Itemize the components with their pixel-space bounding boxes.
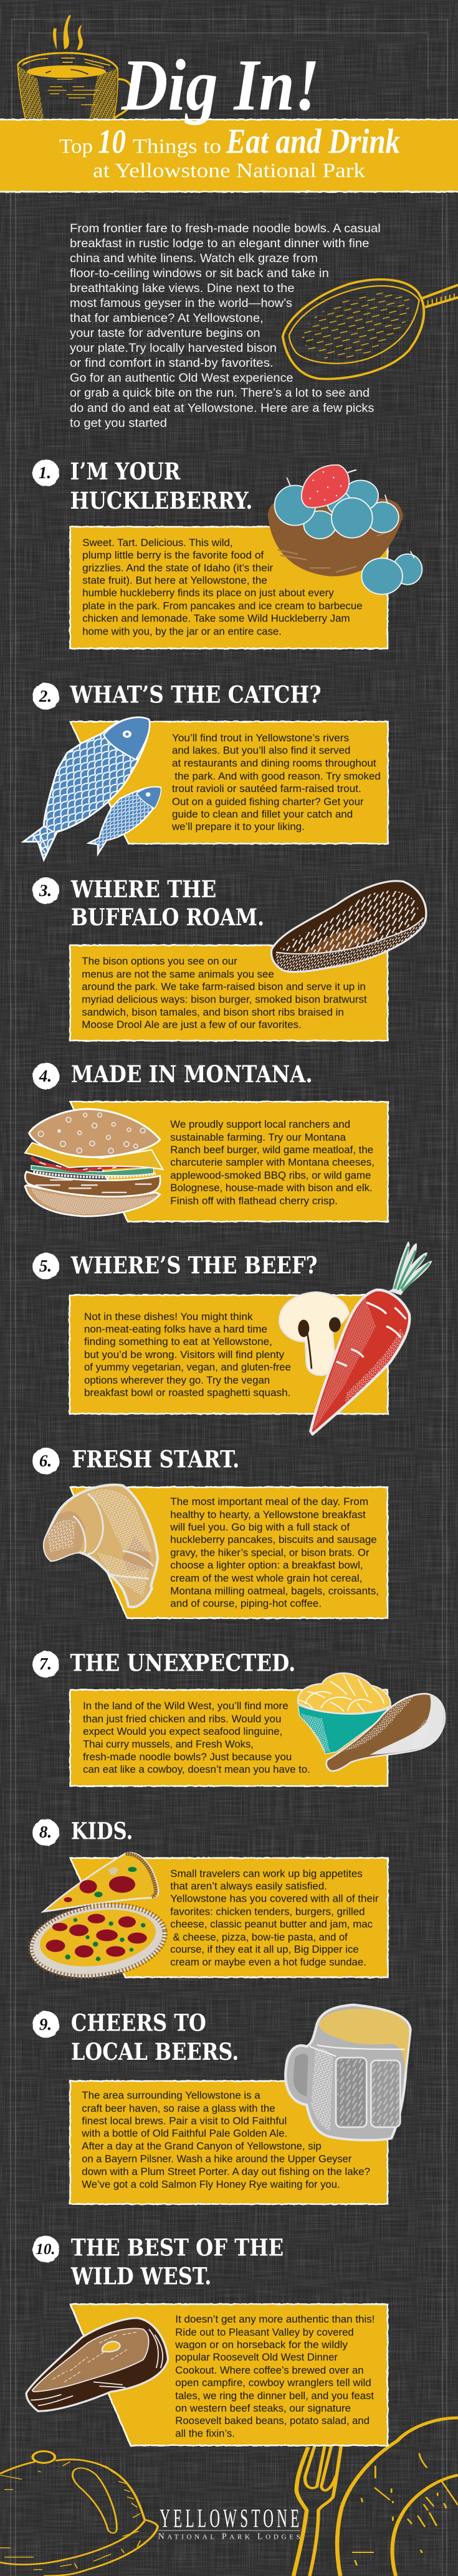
text 4: charcuterie sampler with Montana cheeses,	[170, 1156, 375, 1168]
subtitle: 10	[98, 122, 126, 161]
text 6: and of course, piping-hot coffee.	[170, 1597, 322, 1609]
text 8: cheese, classic peanut butter and jam, mac	[170, 1918, 373, 1930]
intro paragraph: do and do and eat at Yellowstone. Here are a few picks	[70, 401, 375, 415]
heading 10: THE BEST OF THE	[71, 2234, 284, 2261]
intro paragraph: Go for an authentic Old West experience	[70, 371, 293, 385]
heading 4: MADE IN MONTANA.	[71, 1060, 313, 1088]
text 1: plate in the park. From pancakes and ice cream to barbecue	[82, 600, 363, 612]
text 6: The most important meal of the day. From	[170, 1496, 368, 1507]
text 2: guide to clean and fillet your catch and	[172, 808, 353, 820]
icon: noodle bowl and drumstick	[298, 1673, 445, 1771]
section 9: cheers to local beers	[32, 2005, 411, 2204]
section 4: made in Montana	[25, 1060, 388, 1222]
number badge 2: 2.	[39, 687, 52, 705]
icon: bison steak	[271, 881, 426, 972]
intro paragraph: your taste for adventure begins on	[70, 326, 260, 340]
text 10: open campfire, cowboy wranglers tell wild	[175, 2377, 371, 2389]
heading 5: WHERE’S THE BEEF?	[70, 1252, 317, 1279]
heading 9	[71, 2009, 239, 2065]
text 7: can eat like a cowboy, doesn’t mean you have to.	[83, 1763, 310, 1775]
heading 9: LOCAL BEERS.	[71, 2038, 239, 2065]
heading 9: CHEERS TO	[71, 2009, 206, 2037]
section 8: kids	[25, 1818, 388, 1985]
intro paragraph: or find comfort in stand-by favorites.	[70, 356, 274, 370]
intro paragraph: breakfast in rustic lodge to an elegant dinner with fine	[70, 237, 369, 250]
number badge 9	[32, 2011, 59, 2038]
text 8	[170, 1867, 379, 1968]
icon: beer mug	[285, 2005, 411, 2140]
panel 10	[70, 2304, 388, 2445]
heading 3: BUFFALO ROAM.	[71, 903, 264, 931]
number badge 6	[32, 1448, 59, 1474]
text 1: chicken and lemonade. Take some Wild Huckleberry Jam	[82, 613, 350, 625]
text 3: Moose Drool Ale are just a few of our favorites.	[82, 1019, 302, 1031]
number badge 4	[32, 1063, 59, 1090]
number badge 10	[32, 2235, 59, 2263]
text 6: huckleberry pancakes, biscuits and sausage	[170, 1534, 377, 1545]
number badge 2	[32, 683, 59, 710]
subtitle: Things to	[133, 136, 221, 158]
text 10: popular Roosevelt Old West Dinner	[175, 2351, 338, 2363]
text 10	[174, 2313, 375, 2439]
heading 2: WHAT’S THE CATCH?	[70, 681, 322, 709]
text 2: at restaurants and dining rooms throughout	[172, 757, 376, 769]
number badge 3	[32, 877, 59, 904]
text 3: myriad delicious ways: bison burger, smoked bison bratwurst	[82, 993, 367, 1005]
panel 1	[70, 527, 388, 649]
intro paragraph: your plate.Try locally harvested bison	[70, 341, 277, 355]
footer illustration: cloche, fork and plate	[0, 2418, 458, 2576]
number badge 10: 10.	[36, 2241, 55, 2258]
text 10: It doesn’t get any more authentic than this!	[175, 2313, 375, 2325]
icon: burger	[25, 1109, 163, 1216]
text 10: Ride out to Pleasant Valley by covered	[175, 2326, 354, 2338]
text 5: but you’d be wrong. Visitors will find plenty	[84, 1349, 285, 1361]
text 9: finest local brews. Pair a visit to Old Faithful	[82, 2115, 287, 2127]
text 5: breakfast bowl or roasted spaghetti squash.	[84, 1387, 290, 1399]
heading 7: THE UNEXPECTED.	[70, 1649, 295, 1676]
text 10: tales, we ring the dinner bell, and you feast	[175, 2390, 374, 2402]
panel 5	[70, 1295, 388, 1413]
panel 7	[70, 1690, 388, 1786]
text 8: course, if they eat it all up, Big Dipper ice	[170, 1943, 359, 1955]
icon: frying pan	[283, 280, 458, 379]
text 1: home with you, by the jar or an entire case.	[82, 626, 282, 638]
text 7	[83, 1700, 310, 1775]
number badge 7: 7.	[39, 1654, 52, 1673]
text 5: non-meat-eating folks have a hard time	[84, 1323, 267, 1335]
number badge 8: 8.	[39, 1823, 52, 1841]
text 8: favorites: chicken tenders, burgers, grilled	[170, 1905, 365, 1917]
section 2: what's the catch	[24, 681, 388, 860]
heading 3: WHERE THE	[70, 875, 216, 903]
panel 4	[70, 1102, 388, 1222]
text 9: After a day at the Grand Canyon of Yellowstone, sip	[82, 2140, 322, 2152]
text 2	[171, 732, 381, 833]
icon: T-bone steak	[26, 2318, 168, 2411]
section 1: I'm your huckleberry	[32, 458, 422, 649]
text 9	[81, 2090, 370, 2190]
number badge 5	[32, 1253, 59, 1279]
number badge 4: 4.	[39, 1067, 52, 1085]
text 9: down with a Plum Street Porter. A day out fishing on the lake?	[82, 2166, 370, 2177]
section 3: where the buffalo roam	[32, 875, 426, 1040]
heading 1: I’M YOUR	[70, 458, 181, 485]
icon: two trout	[24, 717, 161, 860]
text 1: state fruit). But here at Yellowstone, the	[82, 574, 267, 587]
text 7: Thai curry mussels, and Fresh Woks,	[83, 1738, 254, 1750]
text 10: on western beef steaks, our signature	[175, 2402, 351, 2414]
text 2: Out on a guided fishing charter? Get your	[172, 796, 364, 808]
subtitle: at Yellowstone National Park	[93, 159, 366, 182]
intro paragraph: china and white linens. Watch elk graze from	[70, 252, 318, 265]
text 4: We proudly support local ranchers and	[170, 1118, 350, 1130]
text 1: plump little berry is the favorite food of	[82, 549, 264, 561]
text 1: humble huckleberry finds its place on just about every	[82, 587, 334, 599]
text 8: cream or maybe even a hot fudge sundae.	[170, 1956, 366, 1968]
heading 3	[70, 875, 264, 931]
intro paragraph: that for ambience? At Yellowstone,	[70, 311, 264, 325]
text 2: we’ll prepare it to your liking.	[171, 821, 305, 833]
icon: croissant	[44, 1485, 158, 1607]
section 10: the best of the wild west	[26, 2234, 388, 2445]
text 3: sandwich, bison tamales, and bison short ribs braised in	[82, 1006, 344, 1018]
text 9: We’ve got a cold Salmon Fly Honey Rye waiting for you.	[82, 2178, 340, 2190]
text 7: In the land of the Wild West, you’ll find more	[83, 1700, 289, 1712]
logo: Yellowstone National Park Lodges: YELLOWSTONE	[160, 2505, 299, 2533]
text 5	[84, 1311, 291, 1399]
text 8: & cheese, pizza, bow-tie pasta, and of	[173, 1932, 348, 1943]
heading 10: WILD WEST.	[70, 2262, 211, 2290]
text 4: sustainable farming. Try our Montana	[170, 1131, 346, 1143]
text 10: Cookout. Where coffee’s brewed over an	[175, 2364, 364, 2376]
text 6: healthy to hearty, a Yellowstone breakfast	[170, 1509, 366, 1521]
text 4	[170, 1118, 375, 1207]
logo: Yellowstone National Park Lodges: N ATIONAL P ARK L ODGES	[158, 2532, 300, 2542]
section 7: the unexpected	[32, 1649, 445, 1786]
number badge 1	[32, 460, 59, 486]
intro paragraph: floor-to-ceiling windows or sit back and take in	[70, 267, 329, 280]
heading 8: KIDS.	[71, 1818, 133, 1845]
text 4: Ranch beef burger, wild game meatloaf, the	[170, 1144, 373, 1156]
text 5: finding something to eat at Yellowstone,	[84, 1336, 272, 1347]
panel 6	[70, 1487, 388, 1618]
number badge 5: 5.	[39, 1257, 52, 1275]
intro paragraph: breathtaking lake views. Dine next to the	[70, 281, 295, 295]
text 7: expect Would you expect seafood linguine,	[83, 1725, 282, 1737]
number badge 9: 9.	[39, 2015, 52, 2034]
text 6: gravy, the hiker’s special, or bison brats. Or	[170, 1547, 370, 1559]
text 1: Sweet. Tart. Delicious. This wild,	[82, 537, 233, 549]
icon: bowl of huckleberries and strawberry	[268, 465, 422, 594]
icon: steaming coffee cup	[17, 16, 133, 119]
intro paragraph: most famous geyser in the world—how’s	[70, 296, 292, 310]
number badge 3: 3.	[39, 881, 52, 900]
text 5: of yummy vegetarian, vegan, and gluten-free	[84, 1361, 291, 1373]
text 7: fresh-made noodle bowls? Just because you	[83, 1751, 292, 1763]
text 4: Bolognese, house-made with bison and elk.	[170, 1182, 373, 1194]
icon: mushroom and carrot	[279, 1241, 432, 1434]
text 6: will fuel you. Go big with a full stack of	[169, 1521, 350, 1533]
heading 1	[70, 458, 253, 514]
text 5: Not in these dishes! You might think	[84, 1311, 253, 1323]
text 2: trout ravioli or sautéed farm-raised trout.	[172, 783, 361, 795]
text 6: cream of the west whole grain hot cereal,	[170, 1572, 362, 1584]
panel 8	[70, 1858, 388, 1977]
intro paragraph: or grab a quick bite on the run. There’s a lot to see and	[70, 386, 370, 400]
text 3: The bison options you see on our	[82, 955, 237, 967]
text 10: Roosevelt baked beans, potato salad, and	[175, 2415, 370, 2427]
text 4: applewood-smoked BBQ ribs, or wild game	[170, 1169, 371, 1181]
text 2: You’ll find trout in Yellowstone’s rivers	[172, 732, 349, 744]
icon: pizza and slice	[25, 1853, 171, 1985]
heading 1: HUCKLEBERRY.	[70, 487, 253, 514]
subtitle: Eat and Drink	[226, 122, 400, 161]
text 10: all the fixin’s.	[175, 2427, 235, 2439]
section 5: where's the beef	[32, 1241, 432, 1434]
text 8: that aren’t always easily satisfied.	[170, 1880, 327, 1892]
text 9: The area surrounding Yellowstone is a	[82, 2090, 260, 2101]
intro paragraph: From frontier fare to fresh-made noodle bowls. A casual	[70, 222, 381, 235]
panel 3	[70, 945, 388, 1040]
title band	[0, 120, 458, 192]
number badge 1: 1.	[39, 463, 51, 482]
panel 2	[70, 722, 388, 844]
text 1: grizzlies. And the state of Idaho (it’s their	[82, 562, 274, 573]
text 6	[169, 1496, 379, 1609]
panel 9	[70, 2081, 388, 2204]
text 7: than just fried chicken and ribs. Would you	[83, 1713, 281, 1725]
text 3: around the park. We take farm-raised bison and serve it up in	[82, 981, 366, 993]
text 9: craft beer haven, so raise a glass with the	[82, 2102, 275, 2115]
text 8: Yellowstone has you covered with all of their	[170, 1893, 379, 1904]
text 6: choose a lighter option: a breakfast bowl,	[170, 1559, 363, 1571]
text 2: and lakes. But you’ll also find it served	[172, 745, 350, 757]
text 5: options wherever they go. Try the vegan	[84, 1374, 270, 1386]
text 9: with a bottle of Old Faithful Pale Golden Ale.	[81, 2128, 287, 2140]
number badge 8	[32, 1819, 59, 1846]
text 1	[82, 537, 363, 638]
text 4: Finish off with flathead cherry crisp.	[170, 1195, 338, 1207]
text 3: menus are not the same animals you see	[82, 968, 274, 980]
subtitle: Top	[59, 136, 93, 158]
subtitle	[59, 122, 400, 182]
title: Dig In!: Dig In!	[121, 44, 320, 126]
number badge 6: 6.	[39, 1451, 52, 1470]
heading 10	[70, 2234, 284, 2290]
intro paragraph	[70, 222, 381, 430]
number badge 7	[32, 1651, 59, 1677]
text 3	[82, 955, 367, 1031]
text 10: wagon or on horseback for the wildly	[174, 2339, 348, 2351]
section 6: fresh start	[32, 1446, 388, 1618]
heading 6: FRESH START.	[72, 1446, 239, 1473]
intro paragraph: to get you started	[70, 416, 167, 430]
text 9: on a Bayern Pilsner. Wash a hike around the Upper Geyser	[82, 2153, 352, 2164]
text 8: Small travelers can work up big appetites	[170, 1867, 363, 1879]
text 2: the park. And with good reason. Try smoked	[174, 770, 381, 782]
text 6: Montana milling oatmeal, bagels, croissants,	[170, 1585, 379, 1597]
